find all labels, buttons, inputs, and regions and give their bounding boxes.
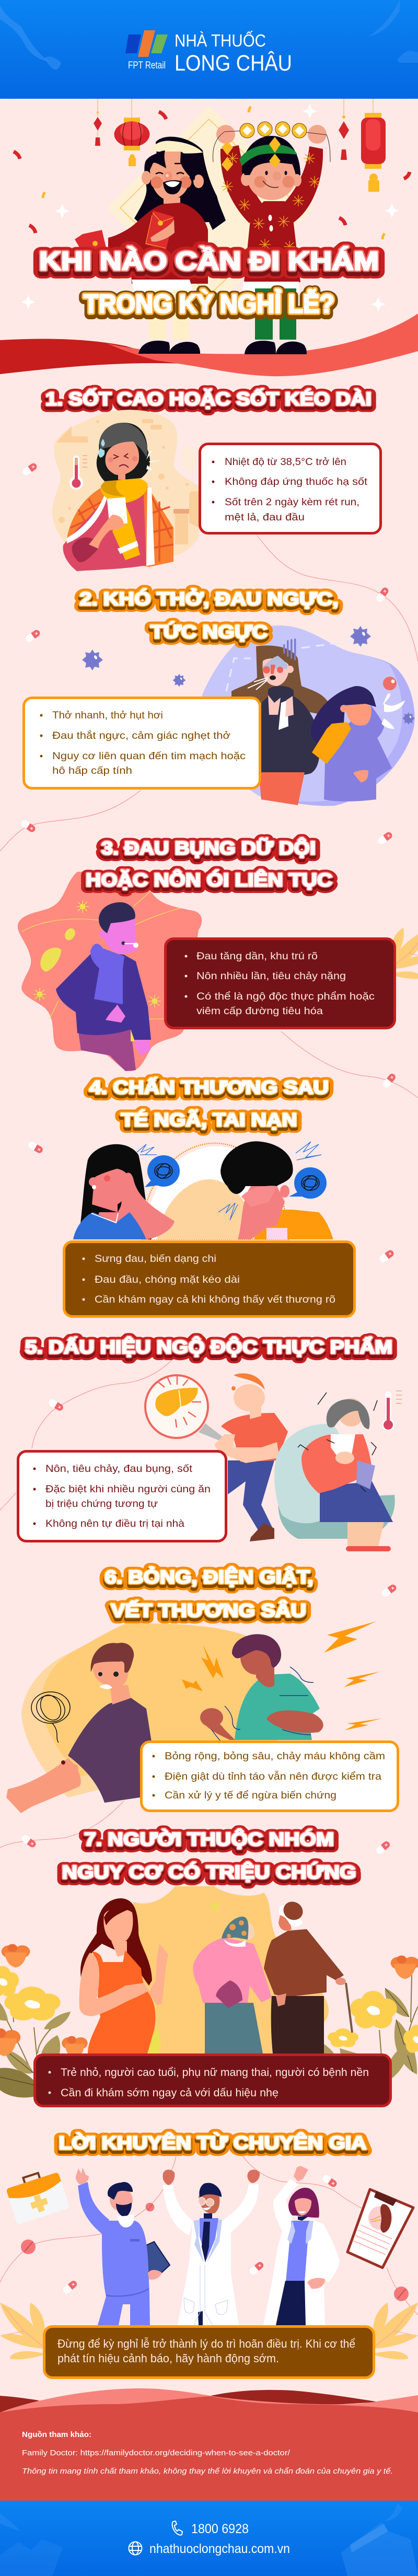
title: KHI NÀO CẦN ĐI KHÁM xyxy=(39,250,379,279)
heading 2: TỨC NGỰC xyxy=(150,623,268,644)
icon: thermometer xyxy=(69,456,87,490)
callout: symptoms 1: Không đáp ứng thuốc hạ sốt xyxy=(225,476,368,488)
heading 3: HOẶC NÔN ÓI LIÊN TỤC xyxy=(86,872,332,893)
heading 1: 1. SỐT CAO HOẶC SỐT KÉO DÀI xyxy=(45,389,371,410)
sources text: Nguồn tham khảo: xyxy=(22,2431,91,2439)
heading 4: TÉ NGÃ, TAI NẠN xyxy=(121,1109,297,1130)
illustration: female doctor in white coat xyxy=(263,2166,340,2325)
callout: symptoms 1 xyxy=(200,444,380,533)
heading 2: 2. KHÓ THỞ, ĐAU NGỰC, xyxy=(79,588,339,609)
heading 6: 6. BỎNG, ĐIỆN GIẬT, xyxy=(104,1567,314,1587)
callout: symptoms 4: Cần khám ngay cả khi không thấy vết thương rõ xyxy=(95,1294,335,1305)
illustration: burns and electric shock xyxy=(6,1621,382,1813)
heading 4: TÉ NGÃ, TAI NẠN xyxy=(121,1111,297,1132)
heading 7: NGUY CƠ CÓ TRIỆU CHỨNG xyxy=(62,1864,356,1885)
title: TRONG KỲ NGHỈ LỄ? xyxy=(84,289,334,319)
heading 3 xyxy=(86,838,332,893)
heading 2: 2. KHÓ THỞ, ĐAU NGỰC, xyxy=(79,588,339,609)
illustration: male doctor in white coat xyxy=(162,2169,260,2325)
sources text: Family Doctor: https://familydoctor.org/deciding-when-to-see-a-doctor/ xyxy=(22,2449,291,2457)
heading 2: 2. KHÓ THỞ, ĐAU NGỰC, xyxy=(79,591,339,612)
heading 3: HOẶC NÔN ÓI LIÊN TỤC xyxy=(86,869,332,890)
heading 8: LỜI KHUYÊN TỪ CHUYÊN GIA xyxy=(59,2132,367,2153)
callout: symptoms 1: mệt lả, đau đầu xyxy=(225,512,305,523)
text: website: nhathuoclongchau.com.vn xyxy=(149,2542,290,2556)
heading 8: LỜI KHUYÊN TỪ CHUYÊN GIA xyxy=(59,2135,367,2156)
icon: thermometer xyxy=(382,1391,402,1431)
heading 7 xyxy=(62,1829,356,1885)
callout: symptoms 1: Nhiệt độ từ 38,5°C trở lên xyxy=(225,456,346,468)
illustration: food poisoning people xyxy=(48,1373,402,1598)
illustration: man with stomach pain xyxy=(18,872,202,1071)
heading 4: 4. CHẤN THƯƠNG SAU xyxy=(89,1077,329,1098)
callout: symptoms 2: Đau thắt ngực, cảm giác nghẹt thở xyxy=(52,729,230,741)
heading 6: 6. BỎNG, ĐIỆN GIẬT, xyxy=(104,1569,314,1590)
speech bubble right xyxy=(289,1167,327,1199)
callout: symptoms 7 xyxy=(34,2055,391,2106)
callout: symptoms 3 xyxy=(165,938,395,1028)
lantern left xyxy=(114,118,149,166)
illustration: blob and women short of breath xyxy=(202,625,415,806)
heading 8: LỜI KHUYÊN TỪ CHUYÊN GIA xyxy=(59,2132,367,2153)
logo wordmark xyxy=(175,30,292,76)
callout: symptoms 5: Đặc biệt khi nhiều người cùng ăn xyxy=(45,1483,211,1495)
heading 6: 6. BỎNG, ĐIỆN GIẬT, xyxy=(104,1568,314,1589)
heading 4 xyxy=(89,1077,329,1133)
heading 6: VẾT THƯƠNG SÂU xyxy=(111,1602,306,1622)
callout: symptoms 2: Nguy cơ liên quan đến tim mạch hoặc xyxy=(52,750,246,762)
heading 3: HOẶC NÔN ÓI LIÊN TỤC xyxy=(86,871,332,892)
heading 3: 3. ĐAU BỤNG DỮ DỘI xyxy=(101,838,316,858)
heading 4: TÉ NGÃ, TAI NẠN xyxy=(121,1109,297,1130)
icon: medical briefcase xyxy=(4,2167,69,2225)
callout: symptoms 5: Nôn, tiêu chảy, đau bụng, sốt xyxy=(45,1463,193,1475)
heading 4: 4. CHẤN THƯƠNG SAU xyxy=(89,1078,329,1099)
callout: expert advice: Đừng để kỳ nghỉ lễ trở thành lý do trì hoãn điều trị. Khi cơ thể xyxy=(57,2337,355,2350)
logo wordmark: NHÀ THUỐC xyxy=(175,30,266,50)
logo: FPT Retail flags: FPT Retail xyxy=(128,60,166,71)
illustration: doctor in blue scrubs xyxy=(76,2167,170,2325)
callout: symptoms 5 xyxy=(18,1452,226,1541)
icon: phone xyxy=(172,2521,182,2535)
sources text: Thông tin mang tính chất tham khảo, không thay thế lời khuyên và chẩn đoán của chuyên gia y tế. xyxy=(22,2467,393,2476)
heading 2: 2. KHÓ THỞ, ĐAU NGỰC, xyxy=(79,590,339,611)
logo: FPT Retail flags xyxy=(125,30,168,71)
title: TRONG KỲ NGHỈ LỄ? xyxy=(84,291,334,320)
heading 3: 3. ĐAU BỤNG DỮ DỘI xyxy=(101,839,316,860)
leaves beside advice box xyxy=(0,2303,418,2360)
title: KHI NÀO CẦN ĐI KHÁM xyxy=(39,248,379,277)
heading 5: 5. DẤU HIỆU NGỘ ĐỘC THỰC PHẨM xyxy=(25,1339,392,1360)
medical icons section 7 xyxy=(20,1834,391,1855)
heading 7: 7. NGƯỜI THUỘC NHÓM xyxy=(84,1830,334,1851)
heading 1: 1. SỐT CAO HOẶC SỐT KÉO DÀI xyxy=(45,390,371,411)
callout: symptoms 5: Không nên tự điều trị tại nhà xyxy=(45,1518,184,1529)
callout: symptoms 4 xyxy=(64,1241,354,1317)
callout: symptoms 4: Đau đầu, chóng mặt kéo dài xyxy=(95,1274,240,1285)
illustration: people with head pain xyxy=(73,1141,333,1239)
heading 4: 4. CHẤN THƯƠNG SAU xyxy=(89,1080,329,1100)
festive decorations: lanterns, ornaments, confetti xyxy=(14,99,410,311)
illustration: boy holding coin string xyxy=(213,122,330,354)
speech bubble left xyxy=(145,1155,180,1187)
heading 5: 5. DẤU HIỆU NGỘ ĐỘC THỰC PHẨM xyxy=(25,1338,392,1359)
heading 5: 5. DẤU HIỆU NGỘ ĐỘC THỰC PHẨM xyxy=(25,1337,392,1357)
callout: symptoms 6: Điện giật dù tỉnh táo vẫn nên được kiểm tra xyxy=(165,1770,381,1782)
heading 8: LỜI KHUYÊN TỪ CHUYÊN GIA xyxy=(59,2134,367,2155)
scribble xyxy=(31,1690,70,1743)
callout: symptoms 6: Cần xử lý y tế để ngừa biến chứng xyxy=(165,1790,336,1801)
callout: symptoms 1: Sốt trên 2 ngày kèm rét run, xyxy=(225,496,359,508)
title xyxy=(39,247,379,320)
heading 6 xyxy=(104,1567,314,1623)
heading 2: TỨC NGỰC xyxy=(150,621,268,642)
icon: liver in circle xyxy=(145,1375,208,1438)
heading 2: TỨC NGỰC xyxy=(150,621,268,642)
callout: symptoms 3: Nôn nhiều lần, tiêu chảy nặng xyxy=(196,970,346,982)
heading 4: 4. CHẤN THƯƠNG SAU xyxy=(89,1077,329,1098)
heading 1: 1. SỐT CAO HOẶC SỐT KÉO DÀI xyxy=(45,389,371,410)
callout: symptoms 5: bị triệu chứng tương tự xyxy=(45,1498,158,1510)
heading 7: NGUY CƠ CÓ TRIỆU CHỨNG xyxy=(62,1863,356,1884)
footer band xyxy=(0,2501,418,2576)
callout: symptoms 3: Có thể là ngộ độc thực phẩm hoặc xyxy=(196,991,375,1002)
heading 1: 1. SỐT CAO HOẶC SỐT KÉO DÀI xyxy=(45,391,371,412)
callout: expert advice xyxy=(44,2326,374,2377)
callout: symptoms 2: Thở nhanh, thở hụt hơi xyxy=(52,710,163,721)
logo wordmark: LONG CHÂU xyxy=(175,51,292,76)
heading 7: 7. NGƯỜI THUỘC NHÓM xyxy=(84,1831,334,1852)
lantern right xyxy=(361,113,386,192)
callout: expert advice: phát tín hiệu cảnh báo, hãy hành động sớm. xyxy=(57,2352,279,2365)
heading 5: 5. DẤU HIỆU NGỘ ĐỘC THỰC PHẨM xyxy=(25,1337,392,1357)
callout: symptoms 3: viêm cấp đường tiêu hóa xyxy=(196,1005,323,1017)
callout: symptoms 3: Đau tăng dần, khu trú rõ xyxy=(196,950,318,962)
heading 2 xyxy=(79,588,339,645)
heading 6: VẾT THƯƠNG SÂU xyxy=(111,1600,306,1621)
callout: symptoms 4: Sưng đau, biến dạng chi xyxy=(95,1253,216,1264)
medical icons doctors xyxy=(21,2174,409,2301)
callout: symptoms 6 xyxy=(141,1742,398,1811)
wave bands and sources panel xyxy=(0,2388,418,2501)
medical icons: capsules and viruses section 1-2 xyxy=(21,462,390,687)
heading 6: 6. BỎNG, ĐIỆN GIẬT, xyxy=(104,1567,314,1587)
title: KHI NÀO CẦN ĐI KHÁM xyxy=(39,247,379,276)
callout: symptoms 2: hô hấp cấp tính xyxy=(52,765,132,776)
heading 4: TÉ NGÃ, TAI NẠN xyxy=(121,1112,297,1133)
heading 3: 3. ĐAU BỤNG DỮ DỘI xyxy=(101,838,316,858)
title: TRONG KỲ NGHỈ LỄ? xyxy=(84,289,334,319)
callout: symptoms 2 xyxy=(24,698,260,788)
callout: symptoms 7: Trẻ nhỏ, người cao tuổi, phụ nữ mang thai, người có bệnh nền xyxy=(61,2067,369,2079)
sources text xyxy=(22,2431,393,2476)
header band xyxy=(0,0,418,99)
medical icons section 3-4 xyxy=(20,819,397,1263)
illustration: at-risk people with flowers xyxy=(0,1886,418,2097)
heading 3: 3. ĐAU BỤNG DỮ DỘI xyxy=(101,840,316,861)
heading 6: VẾT THƯƠNG SÂU xyxy=(111,1600,306,1621)
heading 7: NGUY CƠ CÓ TRIỆU CHỨNG xyxy=(62,1862,356,1883)
title: KHI NÀO CẦN ĐI KHÁM xyxy=(39,247,379,276)
icon: globe xyxy=(129,2542,142,2555)
illustration: woman with fever xyxy=(52,410,199,571)
heading 7: 7. NGƯỜI THUỘC NHÓM xyxy=(84,1829,334,1850)
decorative thin connecting lines xyxy=(0,536,418,2315)
illustration: girl with red envelope xyxy=(75,137,226,354)
callout: symptoms 6: Bỏng rộng, bỏng sâu, chảy máu không cầm xyxy=(165,1750,385,1762)
heading 2: TỨC NGỰC xyxy=(150,624,268,645)
heading 7: 7. NGƯỜI THUỘC NHÓM xyxy=(84,1829,334,1850)
heading 6: VẾT THƯƠNG SÂU xyxy=(111,1603,306,1623)
leaf decoration xyxy=(389,927,418,979)
icon: clipboard with kidney xyxy=(347,2189,413,2268)
text: phone number: 1800 6928 xyxy=(191,2522,249,2536)
heading 3: HOẶC NÔN ÓI LIÊN TỤC xyxy=(86,869,332,890)
callout: symptoms 7: Cần đi khám sớm ngay cả với dấu hiệu nhẹ xyxy=(61,2087,278,2099)
ribbon under title illustration xyxy=(0,314,418,376)
heading 7: NGUY CƠ CÓ TRIỆU CHỨNG xyxy=(62,1862,356,1883)
